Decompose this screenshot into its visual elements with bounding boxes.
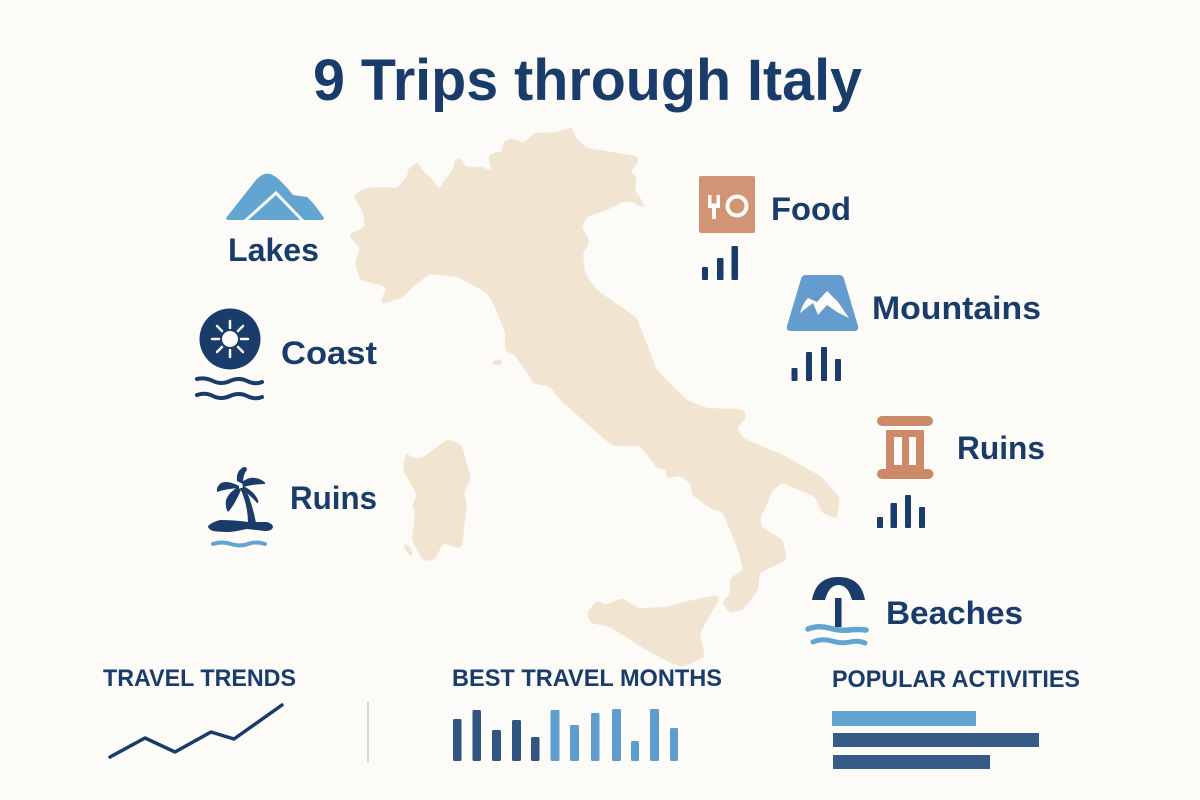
item: Mountains <box>787 275 1041 381</box>
map: Sardinia <box>403 439 471 561</box>
icon: lake mountain <box>226 174 324 221</box>
label: Mountains: Mountains <box>872 290 1041 326</box>
panel: travel trends <box>103 665 296 757</box>
item: Food <box>699 176 851 280</box>
label: Ruins: Ruins <box>957 430 1045 466</box>
label: Lakes: Lakes <box>228 232 319 268</box>
icon: plate and fork <box>699 176 755 233</box>
bar chart: Ruins <box>877 495 925 528</box>
map of Italy <box>348 127 840 667</box>
heading: travel trends: TRAVEL TRENDS <box>103 665 296 692</box>
icon: beach umbrella and waves <box>808 577 866 643</box>
map: mainland <box>348 127 840 613</box>
item: Coast <box>197 308 377 398</box>
label: Food: Food <box>771 191 851 227</box>
item: Beaches <box>808 577 1023 643</box>
heading: popular activities: POPULAR ACTIVITIES <box>832 666 1080 693</box>
icon: mountain badge <box>787 275 858 331</box>
label: Ruins: Ruins <box>290 480 377 516</box>
map: Sicily <box>587 595 720 667</box>
item: Lakes <box>226 174 324 268</box>
icon: sun and waves <box>197 308 262 398</box>
label: Beaches: Beaches <box>886 595 1023 631</box>
bar chart: activities <box>832 711 1039 769</box>
panel: best travel months <box>452 665 722 761</box>
map: Elba <box>487 358 504 366</box>
label: Coast: Coast <box>281 335 377 371</box>
panel: popular activities <box>832 666 1080 769</box>
bar chart: Food <box>702 246 738 280</box>
item: Ruins (east) <box>877 416 1045 528</box>
item: Ruins (west) <box>208 467 377 546</box>
bar chart: Mountains <box>792 347 841 381</box>
line chart <box>110 705 282 757</box>
icon: palm island <box>208 467 273 546</box>
icon: temple column <box>877 416 934 479</box>
heading: best travel months: BEST TRAVEL MONTHS <box>452 665 722 692</box>
map: Sardinia islet <box>402 543 414 558</box>
bar chart: months <box>453 709 678 761</box>
title: 9 Trips through Italy <box>313 48 862 113</box>
